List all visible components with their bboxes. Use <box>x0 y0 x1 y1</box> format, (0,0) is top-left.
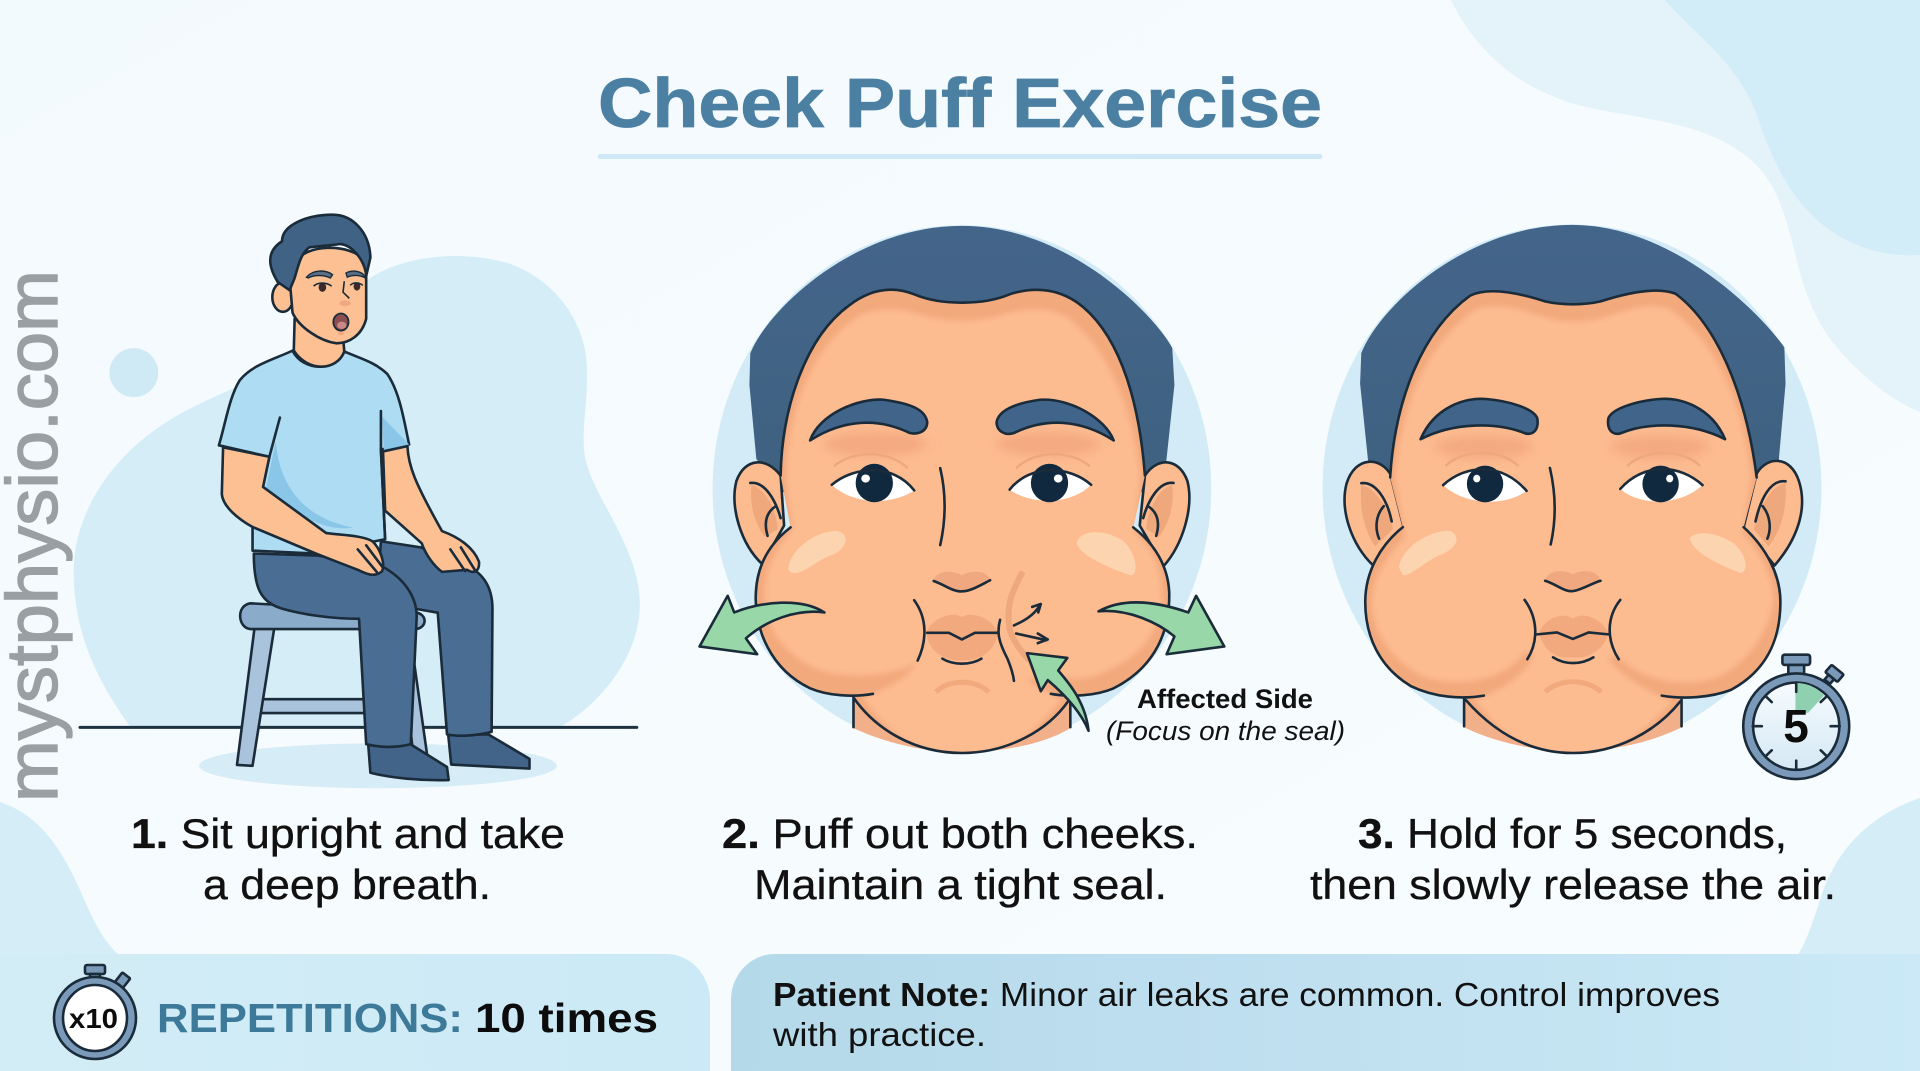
step 2 text: Maintain a tight seal. <box>754 861 1167 908</box>
green arrow: right <box>1099 596 1224 654</box>
patient note text: with practice. <box>772 1016 986 1053</box>
title: Cheek Puff Exercise <box>598 64 1322 142</box>
outline <box>1365 291 1780 753</box>
cheek highlights <box>788 531 1136 575</box>
face <box>290 248 366 343</box>
front leg and shoe <box>254 554 449 780</box>
decorative blob: bottom left <box>0 802 125 960</box>
head skin <box>756 290 1169 759</box>
callout: affected side <box>1106 684 1345 746</box>
panel: repetitions <box>0 954 710 1071</box>
neck <box>294 319 344 367</box>
neck <box>1464 698 1682 751</box>
ear <box>272 282 293 312</box>
icon: stopwatch x10: x10 <box>69 1003 118 1034</box>
green arrow: left <box>700 596 824 654</box>
hair <box>749 226 1174 492</box>
accent circle <box>109 348 158 397</box>
green arrow: affected side <box>1027 653 1089 731</box>
eyes <box>1443 453 1703 502</box>
ears <box>1345 461 1802 565</box>
background circle <box>1323 224 1822 751</box>
background blob <box>74 256 640 727</box>
eye shading <box>1434 435 1709 458</box>
step 3 text: then slowly release the air. <box>1310 861 1836 908</box>
eyebrows <box>810 400 1114 440</box>
decorative blob: bottom right <box>1795 798 1920 960</box>
step 2 text: 2. Puff out both cheeks. <box>722 810 1198 857</box>
repetitions label: REPETITIONS: <box>157 995 463 1041</box>
hair <box>1360 225 1786 502</box>
callout: affected side: Affected Side <box>1137 684 1313 714</box>
icon: stopwatch 5 seconds: 5 <box>1783 700 1809 752</box>
t-shirt <box>219 351 409 554</box>
icon: stopwatch x10 <box>54 965 136 1059</box>
step 1 text: a deep breath. <box>203 861 491 908</box>
small air leak arrows <box>1014 604 1048 643</box>
hair <box>270 215 370 290</box>
step 1 text <box>131 810 565 908</box>
back leg and shoe <box>379 541 529 769</box>
face: step 3 <box>1323 224 1822 759</box>
nose <box>934 468 990 591</box>
decorative blob: top right <box>1451 0 1920 412</box>
nose <box>1545 468 1601 591</box>
arm and hand: near <box>222 447 383 575</box>
arm and hand: far <box>383 446 479 572</box>
ground line <box>80 726 637 729</box>
patient note text <box>772 976 1720 1053</box>
ears <box>735 462 1189 566</box>
mouth <box>1525 600 1620 692</box>
stool <box>237 603 427 766</box>
floor shadow <box>199 743 557 788</box>
step 1 text: 1. Sit upright and take <box>131 810 565 857</box>
cheek highlights <box>1399 531 1746 575</box>
panel: patient note <box>731 954 1920 1071</box>
eye shading <box>823 432 1101 456</box>
brows, eyes, nose, mouth <box>306 271 365 335</box>
icon: stopwatch 5 seconds <box>1743 655 1849 779</box>
patient note text: Patient Note: Minor air leaks are common. Control improves <box>773 976 1720 1013</box>
head skin <box>1365 291 1780 759</box>
eyebrows <box>1421 399 1725 439</box>
callout: affected side: (Focus on the seal) <box>1106 716 1345 746</box>
illustration: seated man <box>74 215 640 788</box>
outline <box>756 290 1169 753</box>
step 2 text <box>722 810 1198 908</box>
neck <box>853 696 1070 752</box>
face: step 2 with green arrows <box>700 225 1224 759</box>
step 3 text: 3. Hold for 5 seconds, <box>1358 810 1787 857</box>
mouth with seal <box>914 572 1029 692</box>
step 3 text <box>1310 810 1836 908</box>
repetitions value: 10 times <box>475 995 658 1041</box>
eyes <box>832 454 1091 502</box>
background circle <box>713 225 1211 752</box>
